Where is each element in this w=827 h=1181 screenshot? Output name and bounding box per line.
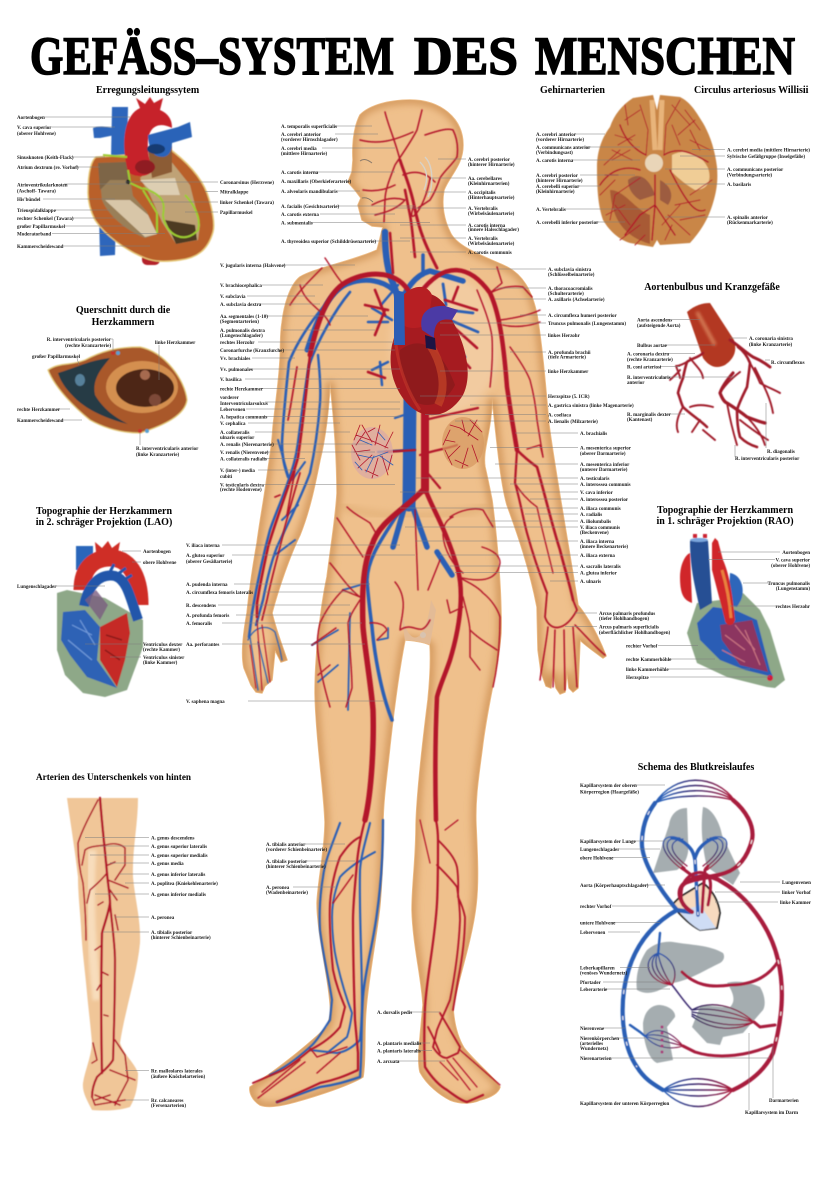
panel: body labels right: A. lienalis (Milzarterie): [548, 420, 598, 425]
labels: A. Vertebralis: [536, 208, 566, 213]
labels: Rr. calcaneares: [151, 1099, 184, 1104]
panel: body labels left: (vorderer Schienbeinarterie): [266, 848, 327, 853]
panel: body labels left: V. testicularis dextra: [220, 483, 264, 488]
body silhouette: [243, 100, 606, 1106]
labels: Darmarterien: [769, 1099, 799, 1104]
labels: Lungenvenen: [782, 881, 811, 886]
labels: A. poplitea (Kniekehlenarterie): [151, 882, 218, 887]
panel: body labels right: (Schlüsselbeinarterie): [548, 273, 595, 278]
labels: (Verbindungsast): [536, 151, 573, 156]
labels: Rr. malleolares laterales: [151, 1069, 203, 1074]
labels: A. tibialis posterior: [151, 931, 193, 936]
panel: body labels left: Coronarfurche (Kranzfurche): [220, 349, 284, 354]
labels: rechtes Herzohr: [776, 605, 811, 610]
labels: (vorderer Hirnarterie): [536, 138, 584, 143]
labels: Kapillarsystem im Darm: [745, 1111, 799, 1116]
labels: Pfortader: [580, 981, 602, 986]
veins: [248, 232, 478, 1102]
panel: Gehirnarterien: [536, 85, 810, 247]
labels: [626, 551, 811, 681]
labels: rechte Herzkammer: [17, 408, 61, 413]
labels: [627, 318, 805, 462]
labels: A. cerebelli superior: [536, 185, 580, 190]
labels: Ventriculus sinister: [143, 656, 185, 661]
panel: body labels left: A. submentalis: [281, 221, 313, 226]
panel: body labels right: A. subclavia sinistra: [548, 268, 592, 273]
panel: body labels left: A. carotis externa: [281, 213, 319, 218]
heading: in 2. schräger Projektion (LAO): [36, 517, 172, 528]
labels: Bulbus aortae: [637, 344, 668, 349]
labels: obere Hohlvene: [580, 856, 614, 861]
panel: body labels left: (vorderer Hirnschlagader): [281, 138, 338, 143]
panel: body labels left: A. plantaris medialis: [377, 1042, 421, 1047]
panel: body labels left: rechte Herzkammer: [220, 387, 264, 392]
panel: body labels right: A. carotis communis: [468, 251, 512, 256]
panel: body labels right: V. iliaca communis: [580, 526, 620, 531]
panel: body labels left: V. subclavia: [220, 295, 246, 300]
panel: body labels right: A. profunda brachii: [548, 351, 591, 356]
labels: Coronarsinus (Herzvene): [220, 181, 274, 186]
labels: Aortenbogen: [782, 551, 810, 556]
panel: body labels right: A. glutea inferior: [580, 571, 618, 576]
labels: Aortenbogen: [143, 550, 171, 555]
labels: A. genus descendens: [151, 836, 195, 841]
panel: body labels left: [186, 125, 445, 1065]
panel: body labels left: A. collateralis: [220, 431, 249, 436]
panel: body labels right: (Wirbelsäulenarterie): [468, 242, 515, 247]
labels: (linke Kranzarterie): [749, 343, 793, 348]
labels: R. interventricularis posterior: [47, 338, 112, 343]
labels: Kapillarsystem der Lunge: [580, 840, 637, 845]
labels: R. interventricularis anterior: [136, 447, 199, 452]
panel: body labels left: A. hepatica communis: [220, 415, 267, 420]
labels: Lebervenen: [580, 931, 605, 936]
labels: His'bündel: [17, 198, 41, 203]
panel: body labels left: A. carotis interna: [281, 171, 319, 176]
heading: in 1. schräger Projektion (RAO): [656, 516, 794, 527]
panel: body labels right: A. brachialis: [580, 432, 607, 437]
panel: body labels right: (tiefer Hohlhandbogen): [599, 617, 649, 622]
panel: body labels right: A. Vertebralis: [468, 237, 498, 242]
cross-section illustration: [48, 347, 187, 433]
panel: body labels left: ulnaris superior: [220, 436, 255, 441]
panel: body labels right: Truncus pulmonalis (Lungenstamm): [548, 322, 626, 327]
panel: body labels left: A. dorsalis pedis: [377, 1011, 412, 1016]
panel: body labels left: Aa. segmentales (1-10): [220, 315, 268, 320]
labels: A. coronaria sinistra: [749, 337, 793, 342]
organs: lungs, liver, gut, kidney: [637, 807, 765, 1063]
labels: (Lungenstamm): [776, 587, 810, 592]
heading: [36, 506, 172, 528]
labels: [536, 133, 810, 226]
labels: A. carotis interna: [536, 159, 574, 164]
kidneys: [351, 417, 484, 479]
heading: Topographie der Herzkammern: [36, 506, 172, 517]
labels: linke Kammer: [780, 901, 812, 906]
panel: body labels left: A. plantaris lateralis: [377, 1049, 421, 1054]
labels: (hinterer Hirnarterie): [536, 179, 583, 184]
labels: A. coronaria dextra: [627, 352, 669, 357]
labels: Kammerscheidewand: [17, 419, 64, 424]
labels: (rechte Kranzarterie): [627, 358, 673, 363]
title: GEFÄSS–SYSTEM: [30, 26, 394, 86]
panel: body labels left: rechtes Herzohr: [220, 341, 255, 346]
panel: body labels right: A. Vertebralis: [468, 207, 498, 212]
panel: body labels right: (Wirbelsäulenarterie): [468, 212, 515, 217]
panel: Topographie RAO: [626, 505, 811, 688]
labels: (Verbindungsarterie): [727, 173, 772, 178]
labels: linker Schenkel (Tawara): [220, 201, 274, 206]
panel: body labels right: (unterer Darmarterie): [580, 468, 628, 473]
panel: Schema des Blutkreislaufes: [580, 762, 812, 1116]
arteries: [250, 110, 605, 1102]
panel: body labels right: A. carotis interna: [468, 224, 506, 229]
labels: (rechte Kranzarterie): [65, 344, 111, 349]
labels: rechter Schenkel (Tawara): [17, 217, 74, 222]
labels: A. cerebri anterior: [536, 133, 577, 138]
labels: Aorta ascendens: [637, 318, 672, 323]
labels: rechte Kammerhöhle: [626, 658, 672, 663]
labels: A. genus superior lateralis: [151, 845, 207, 850]
panel: body labels left: Interventricularsulcus: [220, 402, 268, 407]
labels: A. genus superior medialis: [151, 854, 208, 859]
labels: R. marginalis dexter: [627, 413, 672, 418]
labels: (Rückenmarkarterie): [727, 221, 773, 226]
labels: R. interventricularis posterior: [735, 457, 800, 462]
labels: (arterielles: [580, 1042, 603, 1047]
panel: body labels right: (Beckenvene): [580, 531, 609, 536]
panel: body labels right: (innere Halsschlagader): [468, 228, 519, 233]
labels: (linke Kranzarterie): [136, 453, 180, 458]
brain illustration: [597, 95, 717, 247]
coronary illustration: [670, 303, 780, 447]
labels: A. spinalis anterior: [727, 216, 769, 221]
labels: Kammerscheidewand: [17, 245, 64, 250]
LAO heart illustration: [57, 541, 143, 697]
panel: body labels left: A. renalis (Nierenarterie): [220, 443, 274, 448]
panel: body labels left: A. alveolaris mandibularis: [281, 190, 338, 195]
panel: body labels right: A. mesenterica inferior: [580, 463, 630, 468]
labels: Wundernetz): [580, 1047, 609, 1052]
panel: body labels right: (Hinterhauptsarterie): [468, 196, 515, 201]
panel: body labels right: A. mesenterica superior: [580, 446, 632, 451]
heading: Arterien des Unterschenkels von hinten: [36, 772, 192, 783]
heading: Circulus arteriosus Willisii: [694, 85, 809, 96]
labels: Leberarterie: [580, 988, 608, 993]
panel: body labels left: cubiti: [220, 475, 233, 480]
labels: A. communicans anterior: [536, 146, 591, 151]
panel: body labels right: A. coeliaca: [548, 413, 572, 418]
heading: [656, 505, 794, 527]
title: DES: [414, 26, 518, 86]
labels: Trieuspidalklappe: [17, 209, 57, 214]
labels: [85, 836, 218, 1109]
panel: body labels left: V. basilica: [220, 378, 242, 383]
labels: A. genus inferior lateralis: [151, 873, 205, 878]
panel: body labels right: A. thoracoacromialis: [548, 287, 593, 292]
panel: body labels left: (Wadenbeinarterie): [266, 891, 308, 896]
panel: body labels right: A. ulnaris: [580, 580, 601, 585]
panel: body labels left: V. iliaca interna: [186, 544, 220, 549]
panel: body labels left: A. circumflexa femoris lateralis: [186, 591, 253, 596]
panel: full body circulatory figure: [243, 100, 606, 1106]
panel: body labels left: A. facialis (Gesichtsarterie): [281, 205, 340, 210]
panel: body labels right: linkes Herzohr: [548, 334, 581, 339]
labels: A. cerebelli inferior posterior: [536, 221, 599, 226]
panel: body labels left: A. pudenda interna: [186, 583, 228, 588]
labels: (oberer Hohlvene): [17, 132, 56, 137]
panel: body labels right: A. sacralis lateralis: [580, 565, 621, 570]
labels: (Kleinhirnarterie): [536, 190, 575, 195]
panel: body labels left: A. tibialis anterior: [266, 843, 306, 848]
panel: body labels right: A. interossea communis: [580, 483, 631, 488]
RAO heart illustration: [680, 534, 785, 688]
panel: body labels right: A. iliaca communis: [580, 507, 621, 512]
panel: body labels left: V. cephalica: [220, 422, 246, 427]
panel: body labels right: (oberflächlicher Hohlhandbogen): [599, 631, 670, 636]
title: [30, 26, 795, 86]
labels: Nierenarterien: [580, 1057, 612, 1062]
panel: body labels left: V. (inter-) media: [220, 469, 255, 474]
labels: R. diagonalis: [767, 450, 795, 455]
heart: [672, 883, 720, 930]
labels: R. coni arteriosi: [627, 365, 662, 370]
labels: V. cava superior: [776, 558, 811, 563]
heading: Gehirnarterien: [540, 85, 605, 96]
panel: body labels right: (tiefe Armarterie): [548, 355, 586, 360]
panel: body labels right: A. gastrica sinistra (linke Magenarterie): [548, 404, 634, 409]
panel: body labels left: (Segmentarterien): [220, 320, 259, 325]
panel: body labels right: (Kleinhirnarterien): [468, 182, 510, 187]
panel: body labels left: R. descendens: [186, 604, 216, 609]
panel: body labels right: Herzspitze (5. ICR): [548, 395, 590, 400]
panel: body labels right: A. axillaris (Achselarterie): [548, 298, 605, 303]
panel: Topographie LAO: [17, 506, 185, 697]
labels: Truncus pulmonalis: [767, 582, 810, 587]
blue circuit: [623, 803, 716, 1090]
panel: body labels right: A. iliolumbalis: [580, 520, 611, 525]
panel: body labels left: A. temporalis superficialis: [281, 125, 337, 130]
labels: Lungenschlagader: [580, 848, 620, 853]
labels: A. basilaris: [727, 183, 751, 188]
labels: Papillarmuskel: [220, 211, 253, 216]
labels: großer Papillarmuskel: [17, 225, 66, 230]
panel: body labels right: Aa. cerebellares: [468, 177, 502, 182]
panel: body labels left: A. profunda femoris: [186, 614, 229, 619]
labels: Ventriculus dexter: [143, 643, 183, 648]
labels: V. cava superior: [17, 126, 52, 131]
panel: body labels right: A. cerebri posterior: [468, 158, 511, 163]
panel: body labels right: A. iliaca externa: [580, 554, 615, 559]
circulation diagram: [623, 780, 782, 1106]
labels: (aufsteigende Aorta): [637, 324, 681, 329]
labels: linke Kammerhöhle: [626, 668, 669, 673]
heading: Herzkammern: [92, 317, 155, 328]
labels: Aortenbogen: [17, 116, 45, 121]
heart section illustration: [88, 97, 214, 265]
labels: (linke Kammer): [143, 661, 178, 666]
panel: body labels left: (rechte Hodenvene): [220, 488, 262, 493]
labels: rechter Vorhof: [626, 644, 658, 649]
labels: [17, 550, 185, 666]
panel: body labels right: Arcus palmaris superficialis: [599, 625, 659, 630]
panel: body labels left: A. femoralis: [186, 622, 212, 627]
labels: obere Hohlvene: [143, 561, 177, 566]
panel: body labels right: A. radialis: [580, 513, 602, 518]
labels: [17, 338, 199, 458]
labels: (Kantenast): [627, 418, 653, 423]
labels: (venöses Wundernetz): [580, 971, 628, 976]
labels: Lungenschlagader: [17, 585, 57, 590]
white flow dashes: [623, 802, 782, 1067]
lower leg illustration: [67, 798, 140, 1111]
panel: body labels left: A. cerebri media: [281, 147, 317, 152]
panel: body labels right: Arcus palmaris profundus: [599, 612, 655, 617]
panel: body labels right: A. circumflexa humeri posterior: [548, 314, 618, 319]
labels: Kapillarsystem der oberen: [580, 784, 637, 789]
panel: body labels left: A. collateralis radialis: [220, 457, 267, 462]
labels: A. genus media: [151, 862, 184, 867]
labels: Atrioventrikularknoten: [17, 183, 68, 188]
panel: body labels left: (oberer Gesäßarterie): [186, 560, 233, 565]
ear: [420, 157, 432, 197]
heading: Aortenbulbus und Kranzgefäße: [644, 282, 780, 293]
labels: (Fersenarterien): [151, 1104, 186, 1109]
labels: großer Papillarmuskel: [32, 355, 81, 360]
labels: R. circumflexus: [771, 361, 805, 366]
panel: body labels right: (innere Beckenarterie): [580, 545, 628, 550]
panel: Querschnitt durch die Herzkammern: [17, 305, 199, 458]
heading: Querschnitt durch die: [76, 305, 171, 316]
capillary beds: [645, 780, 754, 1106]
labels: A. peronea: [151, 916, 175, 921]
panel: body labels left: V. renalis (Nierenvene): [220, 451, 269, 456]
panel: body labels left: A. arcuata: [377, 1060, 400, 1065]
heading: Erregungsleitungssytem: [96, 85, 200, 96]
panel: body labels left: A. subclavia dextra: [220, 303, 262, 308]
panel: body labels left: Aa. perforantes: [186, 643, 219, 648]
labels: Mitralklappe: [220, 190, 249, 195]
labels: Moderatorband: [17, 232, 51, 237]
panel: body labels left: V. saphena magna: [186, 700, 225, 705]
panel: body labels right: V. cava inferior: [580, 491, 614, 496]
labels: (äußere Knöchelarterien): [151, 1075, 206, 1080]
labels: Herzspitze: [626, 676, 650, 681]
panel: body labels left: A. maxillaris (Oberkieferarterie): [281, 180, 351, 185]
labels: Sylvische Gefäßgruppe (Inselgefäße): [727, 155, 805, 160]
panel: Aortenbulbus und Kranzgefäße: [627, 282, 805, 462]
panel: body labels right: A. testicularis: [580, 477, 609, 482]
labels: Kapillarsystem der unteren Körperregion: [580, 1102, 670, 1107]
panel: body labels left: Vv. pulmonales: [220, 368, 253, 373]
labels: (oberer Hohlvene): [771, 564, 810, 569]
panel: body labels left: A. tibialis posterior: [266, 860, 308, 865]
panel: body labels left: A. peronea: [266, 886, 290, 891]
heading: Schema des Blutkreislaufes: [638, 762, 754, 773]
panel: body labels left: A. cerebri anterior: [281, 133, 322, 138]
labels: Körperregion (Haargefäße): [580, 790, 639, 795]
labels: Sinusknoten (Keith-Flack): [17, 156, 74, 161]
panel: body labels left: A. thyreoidea superior (Schilddrüsenarterie): [281, 240, 376, 245]
labels: Aorta (Körperhauptschlagader): [580, 884, 649, 889]
labels: [580, 784, 812, 1116]
panel: body labels right: [395, 158, 670, 636]
panel: Erregungsleitungssytem: [17, 85, 274, 265]
panel: body labels left: Vv. brachiales: [220, 357, 250, 362]
panel: body labels left: (mittlere Hirnarterie): [281, 152, 327, 157]
panel: body labels right: linke Herzkammer: [548, 370, 589, 375]
labels: anterior: [627, 381, 645, 386]
panel: body labels right: A. iliaca interna: [580, 540, 615, 545]
labels: untere Hohlvene: [580, 921, 616, 926]
panel: body labels right: (hinterer Hirnarterie): [468, 163, 515, 168]
labels: (rechte Kammer): [143, 648, 180, 653]
panel: Arterien des Unterschenkels von hinten: [36, 772, 218, 1111]
labels: Atrium dextrum (re. Vorhof): [17, 166, 79, 171]
panel: body labels left: Lebervenen: [220, 408, 245, 413]
labels: A. cerebri media (mittlere Hirnarterie): [727, 148, 810, 153]
panel: body labels left: (Lungenschlagader): [220, 334, 263, 339]
labels: (hinterer Schienbeinarterie): [151, 936, 211, 941]
labels: A. cerebri posterior: [536, 174, 579, 179]
heading: [76, 305, 171, 328]
panel: body labels right: (Schulterarterie): [548, 292, 584, 297]
labels: [17, 116, 274, 250]
red circuit: [680, 800, 782, 1090]
panel: body labels right: A. interossea posterior: [580, 498, 629, 503]
labels: A. genus inferior medialis: [151, 893, 206, 898]
panel: body labels left: V. brachiocephalica: [220, 284, 262, 289]
labels: Leberkapillaren: [580, 966, 615, 971]
panel: body labels right: A. occipitalis: [468, 191, 496, 196]
panel: body labels left: A. pulmonalis dextra: [220, 329, 265, 334]
panel: body labels left: (hinterer Schienbeinarterie): [266, 865, 326, 870]
labels: (Aschoff- Tawara): [17, 189, 56, 194]
heading: Topographie der Herzkammern: [657, 505, 793, 516]
heart: [391, 287, 468, 415]
panel: body labels left: vorderer: [220, 396, 240, 401]
panel: body labels right: (oberer Darmarterie): [580, 452, 626, 457]
labels: linker Vorhof: [782, 891, 811, 896]
panel: body labels left: V. jugularis interna (Halsvene): [220, 264, 286, 269]
labels: linke Herzkammer: [155, 341, 196, 346]
labels: rechter Vorhof: [580, 905, 612, 910]
panel: body labels left: A. glutea superior: [186, 554, 225, 559]
labels: A. communicans posterior: [727, 168, 784, 173]
labels: Nierenvene: [580, 1027, 605, 1032]
labels: R. interventricularis: [627, 376, 671, 381]
labels: Nierenkörperchen: [580, 1037, 619, 1042]
